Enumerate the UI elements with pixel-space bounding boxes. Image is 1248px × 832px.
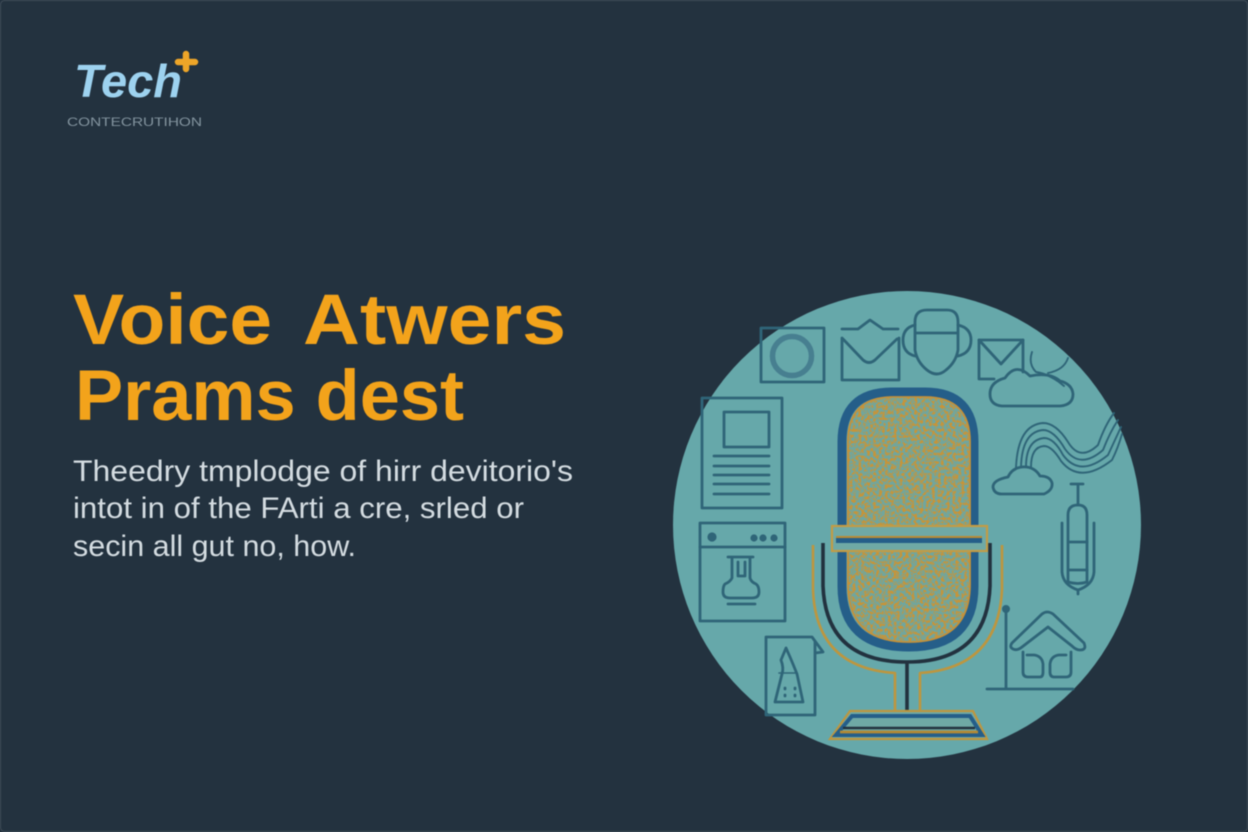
microphone: [813, 392, 1002, 739]
icon: cloud with flowing lines: [993, 413, 1122, 494]
logo plus icon: [178, 54, 195, 69]
icon: browser window with stamp: [700, 523, 785, 621]
body text: Theedry tmplodge of hirr devitorio's: [73, 455, 573, 488]
teal disc: [673, 291, 1141, 759]
mic band: [832, 526, 987, 551]
title: Voice: [73, 281, 272, 360]
icon: ring in frame: [761, 328, 824, 382]
title: [73, 281, 566, 436]
icon: house with pole: [987, 606, 1085, 689]
title: Prams dest: [75, 357, 464, 436]
mic capsule: [842, 392, 974, 647]
icon: head with headset: [903, 310, 971, 374]
logo tagline: CONTECRUTIHON: [67, 115, 202, 129]
icon: cloud with swirl: [990, 352, 1073, 406]
mic cradle: [813, 543, 1002, 711]
body text: intot in of the FArti a cre, srled or: [73, 492, 524, 525]
icon: page with bottle: [766, 637, 823, 715]
illustration circle: [673, 291, 1141, 759]
icon: small microphone: [1062, 484, 1094, 594]
icon: small envelope: [979, 340, 1023, 379]
logo wordmark: Tech: [74, 55, 182, 107]
mic base: [830, 711, 987, 739]
body text: [73, 455, 573, 563]
logo: [67, 54, 202, 129]
icon: document with image and lines: [702, 398, 782, 508]
icon: envelope with flap: [842, 320, 899, 380]
title: Atwers: [303, 281, 566, 360]
body text: secin all gut no, how.: [73, 530, 356, 563]
